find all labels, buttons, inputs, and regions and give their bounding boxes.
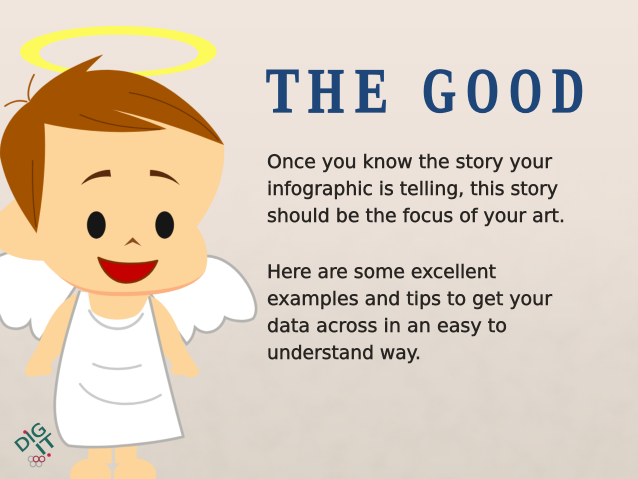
lower body <box>0 250 256 479</box>
text block: second paragraph: understand way. <box>267 342 421 364</box>
icon: head <box>0 106 224 292</box>
icon: left eyebrow <box>81 170 111 185</box>
title: G <box>422 56 456 126</box>
title <box>266 56 584 126</box>
text block: first paragraph: infographic is telling, this story <box>267 178 558 200</box>
text block: second paragraph: Here are some excellent <box>267 261 496 283</box>
logo dots <box>23 430 51 457</box>
icon: halo <box>20 26 217 77</box>
text block: first paragraph <box>267 151 565 227</box>
text block: second paragraph <box>267 261 552 364</box>
dress fold upper <box>93 364 141 369</box>
text block: first paragraph: should be the focus of your art. <box>267 205 565 227</box>
hair shading <box>32 93 218 227</box>
title: O <box>466 56 499 126</box>
icon: neck <box>87 287 151 320</box>
dress fold lower <box>80 384 161 404</box>
icon: chin shadow <box>47 263 205 296</box>
icon: left arm <box>25 293 80 377</box>
logo text IT: IT <box>32 430 62 460</box>
icon: right wing <box>150 256 256 344</box>
hair strands <box>5 75 34 106</box>
dress collar fold <box>89 311 143 329</box>
logo: DIG IT <box>11 419 62 467</box>
text block: first paragraph: Once you know the story your <box>267 151 552 173</box>
title: O <box>509 56 542 126</box>
icon: left wing <box>0 250 80 340</box>
title: D <box>552 56 584 126</box>
icon: right eyebrow <box>150 170 180 185</box>
icon: right arm <box>148 295 199 377</box>
title: E <box>355 56 388 126</box>
icon: mouth <box>98 258 157 283</box>
icon: nose <box>124 237 141 246</box>
icon: right eye <box>155 211 174 239</box>
icon: dress <box>55 292 183 447</box>
dress outline <box>55 292 183 447</box>
text block: second paragraph: data across in an easy to <box>267 315 507 337</box>
icon: feet <box>70 440 156 479</box>
logo text DIG: DIG <box>11 419 51 457</box>
dress fill <box>55 292 183 447</box>
icon: left eye <box>87 211 106 239</box>
logo rings <box>28 456 45 467</box>
title: T <box>266 56 299 126</box>
icon: hair <box>0 54 224 233</box>
angel character <box>0 26 256 479</box>
title: H <box>308 56 344 126</box>
text block: second paragraph: examples and tips to get your <box>267 288 552 310</box>
